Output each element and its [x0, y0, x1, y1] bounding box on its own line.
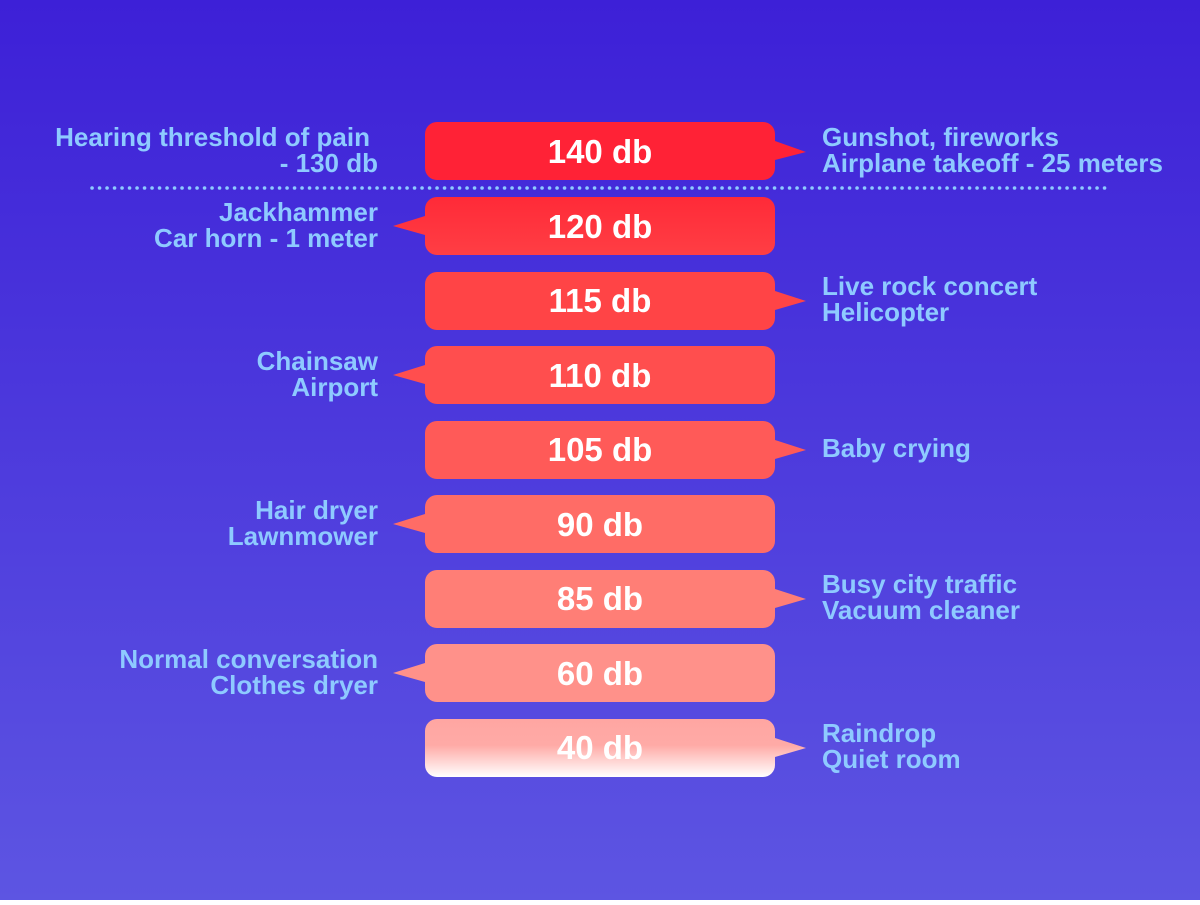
bar: 60 db: 60 db — [557, 655, 643, 692]
label: city traffic: Busy city traffic — [822, 569, 1017, 599]
label: baby crying: Baby crying — [822, 433, 971, 463]
label: city traffic — [822, 569, 1020, 625]
label: raindrop: Raindrop — [822, 718, 936, 748]
bar: 105 db — [425, 421, 806, 479]
bar: 105 db: 105 db — [548, 431, 652, 468]
label: gunshot: Airplane takeoff - 25 meters — [822, 148, 1163, 178]
bar: 140 db: 140 db — [548, 133, 652, 170]
label: hearing threshold of pain — [55, 122, 378, 178]
divider: pain threshold line — [92, 186, 1108, 190]
label: city traffic: Vacuum cleaner — [822, 595, 1020, 625]
label: conversation — [119, 644, 378, 700]
label: conversation: Clothes dryer — [210, 670, 378, 700]
label: rock concert: Helicopter — [822, 297, 949, 327]
bar: 115 db: 115 db — [549, 282, 651, 319]
label: jackhammer: Car horn - 1 meter — [154, 223, 378, 253]
label: rock concert — [822, 271, 1038, 327]
label: raindrop: Quiet room — [822, 744, 961, 774]
label: hair dryer: Hair dryer — [255, 495, 378, 525]
bar: 115 db — [425, 272, 806, 330]
label: hair dryer: Lawnmower — [228, 521, 378, 551]
bar: 40 db — [425, 719, 806, 777]
label: chainsaw: Airport — [291, 372, 378, 402]
bar: 110 db — [393, 346, 775, 404]
bar: 110 db: 110 db — [549, 357, 651, 394]
label: chainsaw — [257, 346, 379, 402]
label: hair dryer — [228, 495, 378, 551]
label: jackhammer: Jackhammer — [219, 197, 378, 227]
bar: 90 db: 90 db — [557, 506, 643, 543]
label: gunshot — [822, 122, 1163, 178]
bar: 85 db: 85 db — [557, 580, 643, 617]
label: conversation: Normal conversation — [119, 644, 378, 674]
bar: 90 db — [393, 495, 775, 553]
bar: 120 db: 120 db — [548, 208, 652, 245]
label: rock concert: Live rock concert — [822, 271, 1038, 301]
label: gunshot: Gunshot, fireworks — [822, 122, 1059, 152]
label: hearing threshold of pain: Hearing threshold of pain — [55, 122, 370, 152]
bar: 40 db: 40 db — [557, 729, 643, 766]
label: chainsaw: Chainsaw — [257, 346, 379, 376]
bar: 120 db — [393, 197, 775, 255]
label: raindrop — [822, 718, 961, 774]
bar: 85 db — [425, 570, 806, 628]
label: jackhammer — [154, 197, 378, 253]
bar: 140 db — [425, 122, 806, 180]
label: hearing threshold of pain: - 130 db — [280, 148, 378, 178]
bar: 60 db — [393, 644, 775, 702]
